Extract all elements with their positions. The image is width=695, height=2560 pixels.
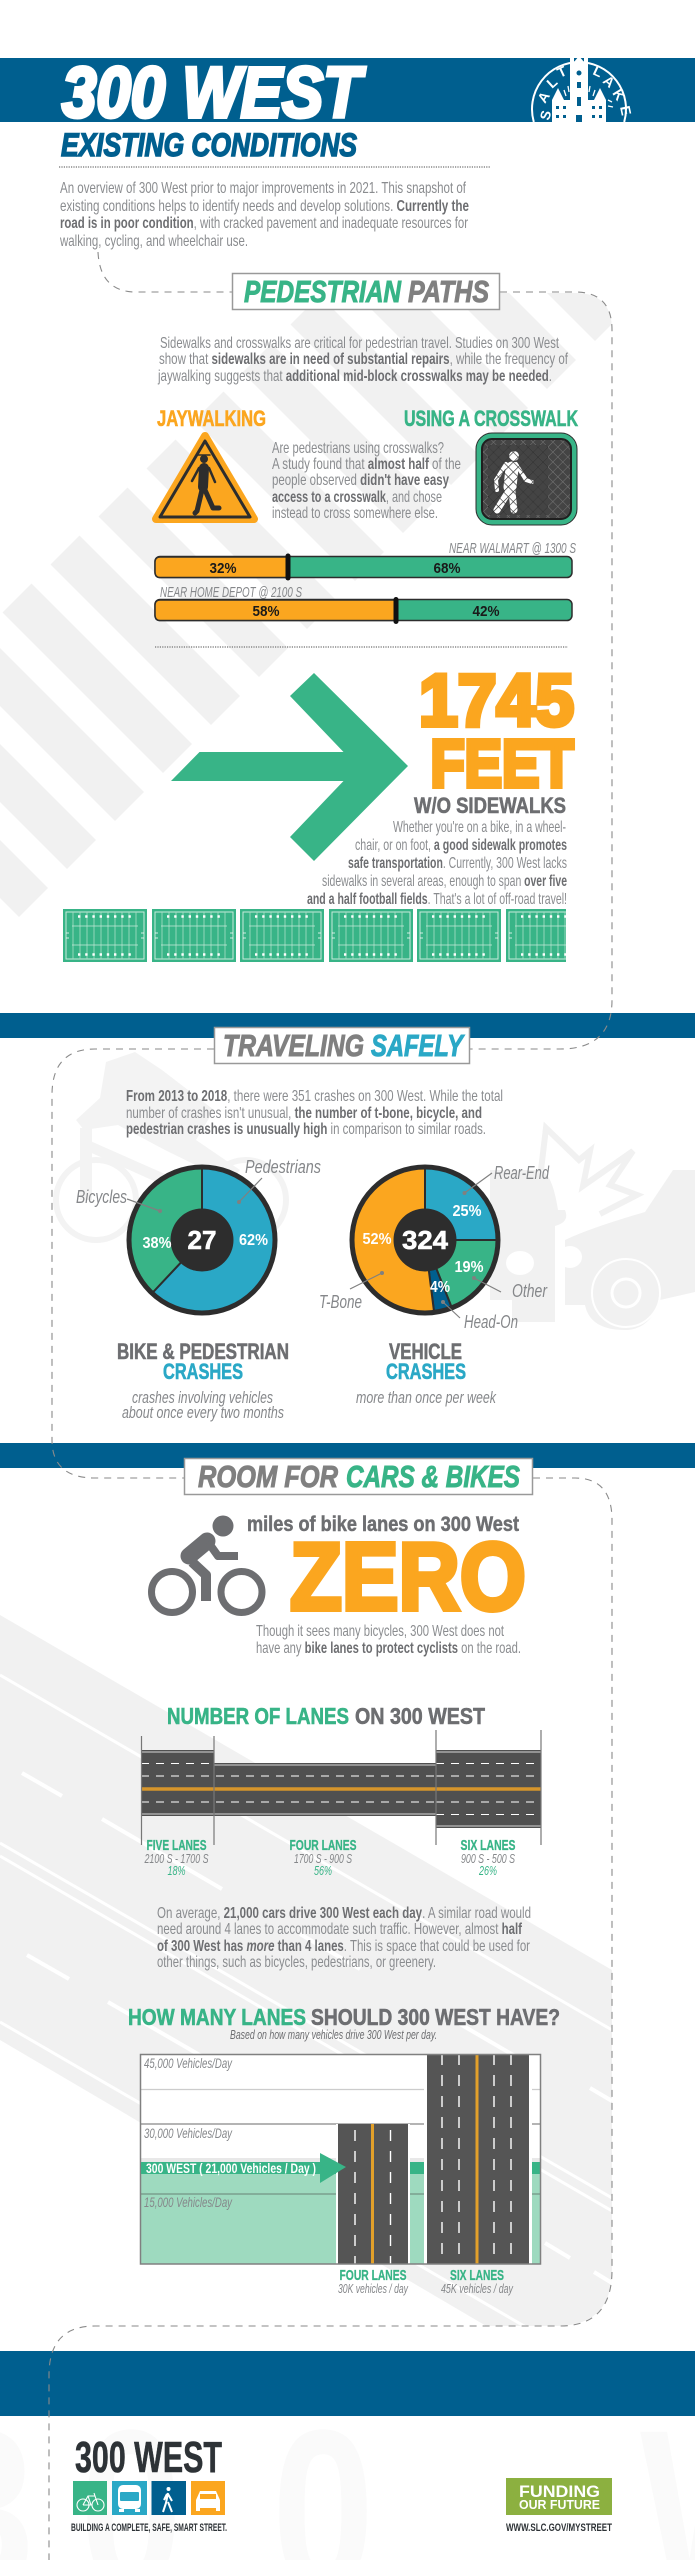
donut chart: vehicle crashes: Head-On (464, 1312, 518, 1332)
caption: bike and pedestrian crashes: about once every two months (122, 1403, 284, 1422)
funding our future logo: FUNDING (519, 2482, 600, 2501)
caption: vehicle crashes (356, 1339, 497, 1407)
bar: near walmart: NEAR WALMART @ 1300 S (449, 540, 576, 557)
stat: zero bike lanes: miles of bike lanes on 300 West (247, 1513, 519, 1536)
crash paragraph: pedestrian crashes is unusually high in comparison to similar roads. (126, 1121, 486, 1138)
heading: number of lanes: ON 300 WEST (355, 1703, 485, 1729)
background stripes: pedestrian crosswalk (0, 293, 612, 916)
funding our future logo: WWW.SLC.GOV/MYSTREET (506, 2522, 612, 2534)
crash paragraph: number of crashes isn't unusual, the number of t-bone, bicycle, and (126, 1105, 482, 1122)
chart: lanes versus vehicle volume: 300 WEST ( 21,000 Vehicles / Day ) (146, 2160, 316, 2176)
labels: four lanes: 56% (314, 1863, 332, 1878)
funding our future logo (506, 2478, 612, 2534)
chart: lanes versus vehicle volume: 15,000 Vehicles/Day (144, 2194, 233, 2210)
icon: car (191, 2481, 225, 2515)
caption: vehicle crashes: VEHICLE (389, 1339, 462, 1364)
bar: near walmart: 68% (434, 560, 460, 577)
heading: how many lanes: SHOULD 300 WEST HAVE? (311, 2004, 560, 2030)
intro paragraph (59, 180, 469, 250)
bar: near home depot: 58% (252, 603, 280, 620)
donut chart: bike and pedestrian crashes (76, 1157, 321, 1313)
bar: near home depot: NEAR HOME DEPOT @ 2100 S (160, 584, 302, 601)
labels: five lanes: 2100 S - 1700 S (144, 1851, 209, 1866)
intro paragraph: road is in poor condition, with cracked pavement and inadequate resources for (60, 215, 468, 232)
icon: pedestrian (152, 2481, 186, 2515)
labels: six lanes: SIX LANES (460, 1837, 516, 1854)
labels: six lanes (460, 1837, 516, 1878)
footer logo: 300 west (71, 2433, 227, 2534)
icon: city seal: E (617, 104, 635, 117)
crosswalk question paragraph: instead to cross somewhere else. (272, 505, 438, 522)
heading: how many lanes (128, 2004, 560, 2042)
stat: 1745 feet: FEET (430, 726, 574, 802)
donut chart: bike and pedestrian crashes: Bicycles (76, 1187, 127, 1207)
labels: five lanes: FIVE LANES (146, 1837, 206, 1854)
donut chart: vehicle crashes (319, 1163, 550, 1332)
heading: using a crosswalk: USING A CROSSWALK (404, 406, 578, 431)
icon: bicycle (73, 2481, 107, 2515)
sidewalk paragraph: chair, or on foot, a good sidewalk promotes (355, 837, 567, 854)
heading: traveling safely: TRAVELING (223, 1028, 364, 1063)
title: 300 WEST (62, 54, 366, 133)
chart: lanes versus vehicle volume: 30,000 Vehicles/Day (144, 2125, 233, 2141)
donut chart: bike and pedestrian crashes: 62% (239, 1232, 268, 1249)
heading: room for cars and bikes (184, 1458, 532, 1494)
bike lanes paragraph (256, 1623, 521, 1657)
intro paragraph: existing conditions helps to identify needs and develop solutions. Currently the (60, 198, 469, 215)
caption: bike and pedestrian crashes (117, 1339, 289, 1422)
pedestrian intro paragraph (157, 335, 568, 385)
stat: 1745 feet (414, 660, 574, 818)
chart: lanes versus vehicle volume: 45,000 Vehicles/Day (144, 2055, 233, 2071)
section band: room for cars and bikes (0, 1443, 695, 1468)
labels: six lanes: 26% (478, 1863, 497, 1878)
arrow (171, 673, 408, 861)
pedestrian intro paragraph: jaywalking suggests that additional mid-block crosswalks may be needed. (157, 368, 552, 385)
crash paragraph: From 2013 to 2018, there were 351 crashes on 300 West. While the total (126, 1088, 503, 1105)
donut chart: bike and pedestrian crashes: 38% (142, 1235, 172, 1252)
sidewalk paragraph (307, 819, 567, 908)
funding our future logo: OUR FUTURE (519, 2497, 600, 2512)
labels: five lanes (144, 1837, 209, 1878)
donut chart: vehicle crashes: 324 (402, 1225, 449, 1255)
labels: four lanes capacity: 30K vehicles / day (338, 2281, 409, 2296)
crosswalk question paragraph: people observed didn't have easy (272, 472, 449, 489)
bar: near walmart: 32% (210, 560, 236, 577)
heading: pedestrian paths: PATHS (408, 274, 489, 309)
icon: city seal: L (591, 62, 606, 81)
bar: near home depot: 42% (472, 603, 500, 620)
traffic paragraph: of 300 West has more than 4 lanes. This is space that could be used for (157, 1938, 530, 1955)
stat: 1745 feet: W/O SIDEWALKS (414, 793, 566, 818)
donut chart: bike and pedestrian crashes: Pedestrians (245, 1157, 321, 1177)
icon: jaywalking warning sign (156, 436, 254, 519)
intro paragraph: An overview of 300 West prior to major improvements in 2021. This snapshot of (60, 180, 466, 197)
labels: four lanes (290, 1837, 356, 1878)
heading: pedestrian paths: PEDESTRIAN (244, 274, 401, 309)
labels: four lanes capacity: FOUR LANES (340, 2267, 406, 2284)
labels: six lanes capacity (441, 2267, 514, 2296)
icon: walking figure white (496, 451, 532, 510)
caption: bike and pedestrian crashes: CRASHES (163, 1359, 243, 1384)
labels: four lanes: 1700 S - 900 S (294, 1851, 352, 1866)
labels: four lanes: FOUR LANES (290, 1837, 356, 1854)
donut chart: vehicle crashes: 52% (362, 1231, 392, 1248)
bike lanes paragraph: have any bike lanes to protect cyclists on the road. (256, 1640, 521, 1657)
stat: 1745 feet: 1745 (419, 660, 574, 742)
crosswalk question paragraph: access to a crosswalk, and chose (272, 489, 442, 506)
donut chart: vehicle crashes: Rear-End (494, 1163, 550, 1183)
crosswalk question paragraph: Are pedestrians using crosswalks? (272, 440, 444, 457)
icon: city seal: S (536, 109, 554, 122)
donut chart: bike and pedestrian crashes: 27 (188, 1225, 216, 1255)
header band (0, 58, 695, 122)
section band: traveling safely (0, 1013, 695, 1038)
road diagram (141, 1730, 541, 1845)
sidewalk paragraph: Whether you're on a bike, in a wheel- (393, 819, 566, 836)
caption: bike and pedestrian crashes: BIKE & PEDESTRIAN (117, 1339, 289, 1364)
icon: bus (112, 2481, 147, 2515)
heading: jaywalking: JAYWALKING (157, 406, 266, 431)
heading: room for cars and bikes: ROOM FOR (198, 1459, 338, 1494)
icon: city seal (532, 56, 635, 122)
heading: traveling safely (214, 1028, 470, 1064)
labels: six lanes: 900 S - 500 S (461, 1851, 515, 1866)
background: car crash silhouette (490, 1128, 695, 1330)
icon: cyclist (152, 1516, 262, 1612)
sidewalk paragraph: and a half football fields. That's a lot of off-road travel! (307, 891, 567, 908)
caption: bike and pedestrian crashes: crashes involving vehicles (132, 1388, 273, 1407)
caption: vehicle crashes: CRASHES (386, 1359, 466, 1384)
traffic paragraph: On average, 21,000 cars drive 300 West each day. A similar road would (157, 1905, 531, 1922)
heading: how many lanes: HOW MANY LANES (128, 2004, 306, 2030)
footer logo: 300 west: BUILDING A COMPLETE, SAFE, SMART STREET. (71, 2522, 227, 2534)
labels: six lanes capacity: SIX LANES (450, 2267, 504, 2284)
donut chart: vehicle crashes: 19% (454, 1259, 484, 1276)
sidewalk paragraph: sidewalks in several areas, enough to span over five (322, 873, 567, 890)
bike lanes paragraph: Though it sees many bicycles, 300 West does not (256, 1623, 504, 1640)
heading: number of lanes: NUMBER OF LANES (167, 1703, 349, 1729)
icon: walk signal (476, 433, 577, 525)
crosswalk question paragraph: A study found that almost half of the (272, 456, 461, 473)
icon: city seal: A (534, 89, 553, 106)
intro paragraph: walking, cycling, and wheelchair use. (59, 233, 248, 250)
heading: traveling safely: SAFELY (371, 1028, 466, 1063)
footer logo: 300 west: 300 WEST (75, 2433, 222, 2482)
bar: near walmart (155, 540, 576, 580)
crash paragraph (126, 1088, 503, 1138)
heading: room for cars and bikes: CARS & BIKES (346, 1459, 520, 1494)
icon: city seal: T (555, 62, 569, 81)
traffic paragraph: other things, such as bicycles, pedestrians, or greenery. (157, 1954, 436, 1971)
background: bicycle rider silhouette (56, 1052, 286, 1240)
icon: city seal: K (609, 86, 628, 103)
traffic paragraph: need around 4 lanes to accommodate such traffic. However, almost half (157, 1921, 522, 1938)
dashed route line (49, 252, 612, 2560)
arrow: 300 west volume (141, 2153, 346, 2183)
icon: city seal: L (543, 73, 561, 91)
footer band (0, 2351, 695, 2416)
donut chart: vehicle crashes: 25% (452, 1203, 482, 1220)
stat: zero bike lanes: ZERO (290, 1524, 526, 1630)
donut chart: vehicle crashes: Other (512, 1281, 548, 1301)
icons: football fields (63, 909, 590, 962)
labels: six lanes capacity: 45K vehicles / day (441, 2281, 514, 2296)
labels: four lanes capacity (338, 2267, 409, 2296)
caption: vehicle crashes: more than once per week (356, 1388, 497, 1407)
donut chart: vehicle crashes: T-Bone (319, 1292, 362, 1312)
labels: five lanes: 18% (168, 1863, 186, 1878)
pedestrian intro paragraph: show that sidewalks are in need of substantial repairs, while the frequency of (159, 351, 568, 368)
subtitle: EXISTING CONDITIONS (61, 127, 358, 163)
traffic paragraph (157, 1905, 531, 1971)
icon: walking figure (192, 455, 219, 513)
heading: how many lanes: Based on how many vehicles drive 300 West per day. (230, 2027, 437, 2042)
donut chart: vehicle crashes: 4% (430, 1279, 450, 1296)
icon: city seal: A (600, 72, 618, 91)
crosswalk question paragraph (272, 440, 461, 522)
bar: near home depot (155, 584, 572, 624)
background: road diagonal (0, 1615, 612, 2400)
chart: lanes versus vehicle volume (140, 2054, 540, 2264)
sidewalk paragraph: safe transportation. Currently, 300 West lacks (348, 855, 567, 872)
